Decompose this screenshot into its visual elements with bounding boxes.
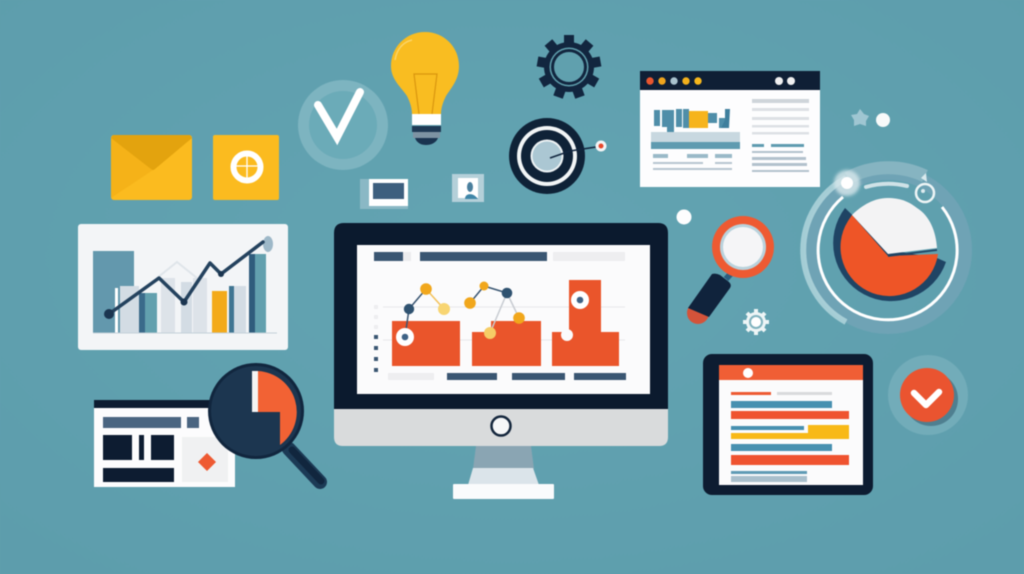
panel: tablet — [703, 354, 873, 495]
icon: yellow tile with circle — [213, 135, 279, 200]
monitor power button — [492, 416, 510, 436]
monitor screen — [357, 245, 650, 394]
chart bars — [93, 251, 277, 334]
tablet rows — [731, 392, 849, 482]
orange diamond — [198, 453, 216, 471]
first connected nodes — [396, 283, 450, 346]
decorative dot — [876, 113, 890, 127]
third chart markers — [561, 291, 589, 341]
gauge navy arc — [833, 208, 946, 301]
icon: small screen card — [360, 179, 408, 209]
gauge orange slice — [840, 215, 938, 296]
decorative star icon — [851, 109, 869, 126]
browser window control dots — [646, 77, 795, 85]
icon: small profile card — [452, 174, 484, 202]
icon: checkmark circle — [298, 80, 388, 170]
screen header bars — [374, 252, 625, 261]
monitor body — [334, 409, 668, 446]
orange bar shapes — [392, 280, 619, 366]
icon: envelope — [111, 135, 192, 200]
icon: light bulb — [391, 32, 459, 145]
panel: desktop monitor — [334, 223, 668, 499]
browser bands and text lines — [651, 99, 809, 172]
panel: line and bar chart — [78, 224, 288, 350]
icon: gear — [537, 35, 601, 99]
panel: browser window — [640, 71, 820, 187]
icon: orange magnifying glass — [687, 216, 774, 324]
icon: orange down chevron button — [888, 355, 968, 435]
chart trend line — [104, 236, 273, 319]
browser bar graphic — [654, 109, 730, 132]
gauge outer rings — [803, 168, 965, 327]
icon: target with dart — [509, 118, 606, 194]
monitor stand — [453, 446, 554, 499]
screen axis ticks — [374, 305, 378, 372]
gauge white slice — [852, 198, 937, 254]
decorative dot near magnifier — [676, 210, 692, 224]
screen footer bars — [388, 373, 626, 380]
icon: navy magnifying glass with pie — [208, 363, 321, 482]
panel: dashboard card — [94, 400, 235, 487]
icon: small white gear — [743, 309, 769, 335]
second connected nodes — [464, 282, 525, 339]
panel: gauge pie chart — [803, 168, 965, 327]
